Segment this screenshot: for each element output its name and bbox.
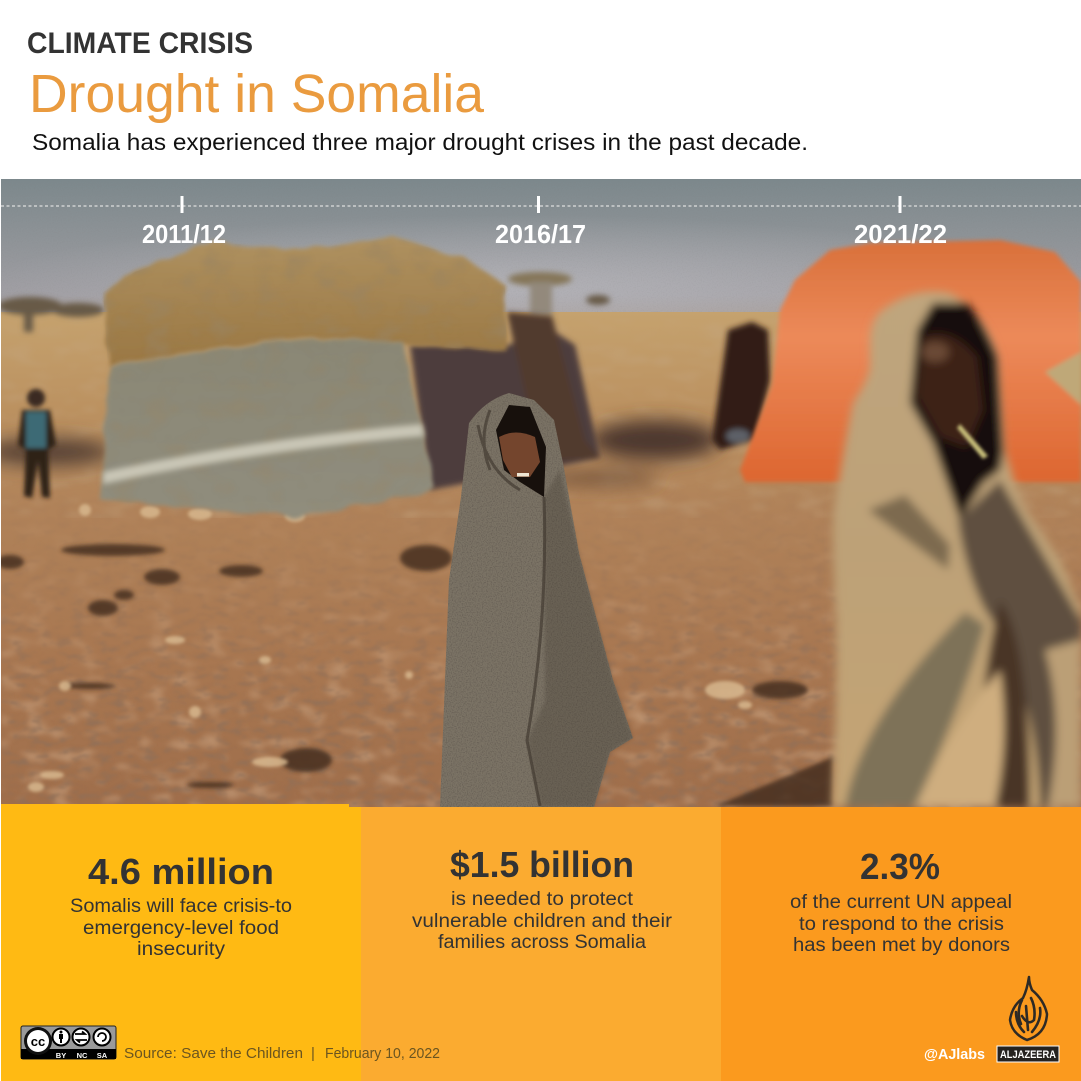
description xyxy=(70,896,292,960)
pale stripe on tarp xyxy=(103,424,424,484)
cigarette xyxy=(957,424,988,459)
source line xyxy=(124,1045,440,1062)
child wrapped in grey blanket xyxy=(440,393,633,807)
dark folds at right of shawl xyxy=(958,480,1081,807)
icon: Al Jazeera calligraphic drop xyxy=(1010,977,1047,1040)
icon: Creative Commons BY-NC-SA badge xyxy=(21,1026,116,1060)
description: vulnerable children and their xyxy=(412,911,673,932)
background figure in dark cloth xyxy=(712,322,770,450)
blanket shaded flap xyxy=(528,470,633,807)
description xyxy=(412,889,673,953)
description xyxy=(790,892,1012,956)
arid ground xyxy=(1,312,1081,807)
description: Somalis will face crisis-to xyxy=(70,896,292,917)
logo: Al Jazeera xyxy=(997,977,1059,1062)
handle: @AJlabs: @AJlabs xyxy=(924,1046,985,1063)
ground shadows xyxy=(0,420,720,485)
face xyxy=(917,334,983,447)
timeline across photo xyxy=(1,196,1081,249)
hood opening xyxy=(496,405,546,497)
description: to respond to the crisis xyxy=(799,914,1004,935)
panel: $1.5 billion xyxy=(361,807,721,1081)
description: families across Somalia xyxy=(438,932,646,953)
icon: Creative Commons BY-NC-SA badge: SA xyxy=(97,1051,108,1060)
timeline marker: 2011/12: 2011/12 xyxy=(142,219,226,249)
grey shadow bands on shawl xyxy=(868,495,950,570)
icon: Creative Commons BY-NC-SA badge: cc xyxy=(31,1034,45,1049)
far ground mottling xyxy=(38,360,1062,518)
hut: thatched roof and grey tarp xyxy=(100,235,510,520)
source line: February 10, 2022 xyxy=(325,1045,440,1062)
distant trees xyxy=(0,272,610,332)
photo: Somali child and man beside shelters in a drought-stricken camp xyxy=(0,179,1081,810)
hood shadow xyxy=(910,303,1003,520)
dark shelter behind hut xyxy=(410,312,600,490)
header: kicker, title and subtitle xyxy=(27,27,808,155)
stat: 2.3%: 2.3% xyxy=(860,846,940,887)
icon: Creative Commons BY-NC-SA badge: NC xyxy=(77,1051,88,1060)
blanket folds xyxy=(478,410,545,806)
description: is needed to protect xyxy=(451,889,634,910)
child's face xyxy=(499,432,540,477)
title: drought in Somalia: Drought in Somalia xyxy=(29,64,485,124)
description: of the current UN appeal xyxy=(790,892,1012,913)
man in beige shawl xyxy=(832,292,1081,807)
description: insecurity xyxy=(137,939,226,960)
description: has been met by donors xyxy=(793,935,1010,956)
source line: Source: Save the Children xyxy=(124,1045,303,1062)
timeline marker: 2016/17: 2016/17 xyxy=(495,219,586,249)
sky xyxy=(1,179,1081,324)
stat: $1.5 billion: $1.5 billion xyxy=(450,844,634,885)
timeline marker: 2021/22 xyxy=(854,196,947,249)
smile xyxy=(517,473,529,476)
timeline marker: 2011/12 xyxy=(142,196,226,249)
orange tent xyxy=(740,240,1081,482)
pebbles and shadows on the ground xyxy=(0,504,833,806)
panel: 2.3% xyxy=(721,807,1081,1081)
stat: 4.6 million: 4.6 million xyxy=(88,851,274,892)
foreground earth texture xyxy=(1,580,1058,807)
timeline marker: 2021/22: 2021/22 xyxy=(854,219,947,249)
timeline marker: 2016/17 xyxy=(495,196,586,249)
distant figure: standing child xyxy=(18,389,56,498)
icon: Creative Commons BY-NC-SA badge: BY xyxy=(56,1051,66,1060)
panel: 4.6 million xyxy=(1,804,361,1081)
description: emergency-level food xyxy=(83,918,279,939)
source line: | xyxy=(311,1045,315,1062)
Al Jazeera wordmark: ALJAZEERA xyxy=(1000,1049,1056,1061)
kicker: climate crisis: CLIMATE CRISIS xyxy=(27,27,253,60)
subtitle: Somalia has experienced three major drought crises in the past decade. xyxy=(32,129,808,155)
